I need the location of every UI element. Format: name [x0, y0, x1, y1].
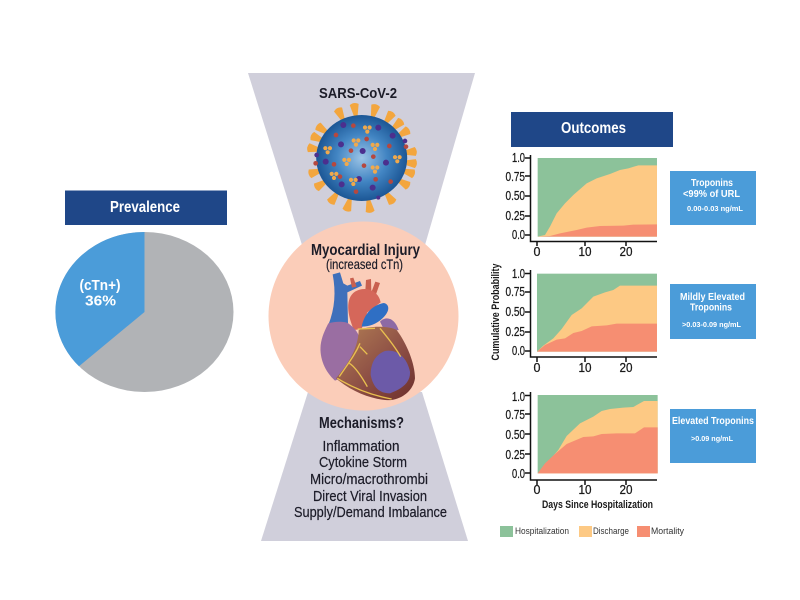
list: mechanisms: Direct Viral Invasion [313, 489, 427, 505]
info box: mildly elevated [670, 284, 756, 339]
circle: myocardial injury [268, 222, 458, 410]
icon: heart [320, 272, 415, 400]
chart: troponins normal: 0 [534, 245, 541, 259]
left atrium [380, 318, 399, 332]
info box: normal troponins: 0.00-0.03 ng/mL [687, 206, 744, 213]
chart: elevated troponins: 0.75 [506, 408, 525, 422]
icon: coronavirus [306, 102, 417, 214]
hourglass: bottom funnel [261, 392, 468, 541]
list: mechanisms: Cytokine Storm [319, 455, 407, 471]
info box: normal troponins [670, 171, 756, 225]
info box: mildly elevated: Troponins [690, 302, 732, 314]
chart: elevated troponins: 0.0 [512, 467, 525, 481]
legend: Discharge [593, 526, 629, 536]
chart: troponins normal: 20 [620, 245, 633, 259]
info box: elevated [670, 409, 756, 463]
chart: troponins normal: 0.0 [512, 228, 525, 242]
pie chart: prevalence [55, 232, 233, 392]
chart: troponins normal: 1.0 [512, 151, 525, 165]
vessel: superior vena cava [328, 272, 362, 325]
coronary vessels [337, 328, 401, 399]
chart: mildly elevated troponins: 0.0 [512, 344, 525, 358]
chart: elevated troponins: 1.0 [512, 390, 525, 404]
info box: normal troponins: Troponins [691, 178, 733, 189]
heading: Outcomes: Outcomes [561, 120, 626, 137]
info box: elevated: Elevated Troponins [672, 416, 754, 427]
list: mechanisms: Micro/macrothrombi [310, 472, 428, 488]
chart: mildly elevated troponins: 0 [534, 361, 541, 375]
chart: elevated troponins: 10 [578, 483, 592, 497]
list: mechanisms [294, 439, 447, 521]
pulmonary artery [362, 303, 388, 327]
chart: troponins normal: 0.75 [506, 170, 525, 184]
heading: Myocardial Injury: Myocardial Injury [311, 242, 420, 259]
axis label: Cumulative Probability: Cumulative Probability [490, 263, 502, 360]
chart: troponins normal: 0.25 [506, 209, 525, 223]
ventricles [336, 327, 415, 400]
chart: mildly elevated troponins: 1.0 [512, 267, 525, 281]
infarct area [371, 351, 410, 393]
chart: mildly elevated troponins: 10 [578, 361, 592, 375]
heading: SARS-CoV-2: SARS-CoV-2 [319, 85, 397, 102]
info box: elevated: >0.09 ng/mL [691, 436, 734, 443]
legend: Mortality [651, 526, 684, 536]
legend [500, 526, 684, 537]
chart: mildly elevated troponins: 20 [620, 361, 633, 375]
axis label: Days Since Hospitalization: Days Since Hospitalization [542, 499, 653, 511]
chart: elevated troponins: 0 [534, 483, 541, 497]
vessels: arch branches [350, 278, 380, 294]
chart: mildly elevated troponins: 0.25 [506, 325, 525, 339]
aorta [348, 289, 381, 330]
chart: elevated troponins: 0.50 [506, 428, 525, 442]
chart: troponins normal [506, 151, 657, 259]
subheading: increased cTn: (increased cTn) [326, 256, 403, 272]
chart: elevated troponins [506, 390, 658, 497]
heading: Mechanisms: Mechanisms? [319, 415, 404, 432]
chart: troponins normal: 10 [578, 245, 592, 259]
hourglass: top funnel [248, 73, 475, 245]
legend: Hospitalization [515, 526, 569, 536]
chart: mildly elevated troponins: 0.50 [506, 305, 525, 319]
chart: mildly elevated troponins [506, 267, 657, 375]
pie label: 36% [85, 292, 116, 310]
chart: elevated troponins: 20 [620, 483, 633, 497]
chart: mildly elevated troponins: 0.75 [506, 285, 525, 299]
info box: mildly elevated: Mildly Elevated [680, 292, 745, 303]
pie label: (cTn+) [80, 277, 121, 294]
pie label [80, 277, 121, 310]
chart: troponins normal: 0.50 [506, 189, 525, 203]
heading: Outcomes [511, 112, 673, 147]
info box: normal troponins: <99% of URL [683, 189, 740, 200]
list: mechanisms: Supply/Demand Imbalance [294, 505, 447, 521]
heading: Prevalence [65, 190, 227, 225]
list: mechanisms: Inflammation [322, 439, 400, 455]
info box: mildly elevated: >0.03-0.09 ng/mL [682, 322, 742, 329]
heading: Prevalence: Prevalence [110, 199, 180, 216]
right atrium [320, 322, 360, 381]
chart: elevated troponins: 0.25 [506, 448, 525, 462]
